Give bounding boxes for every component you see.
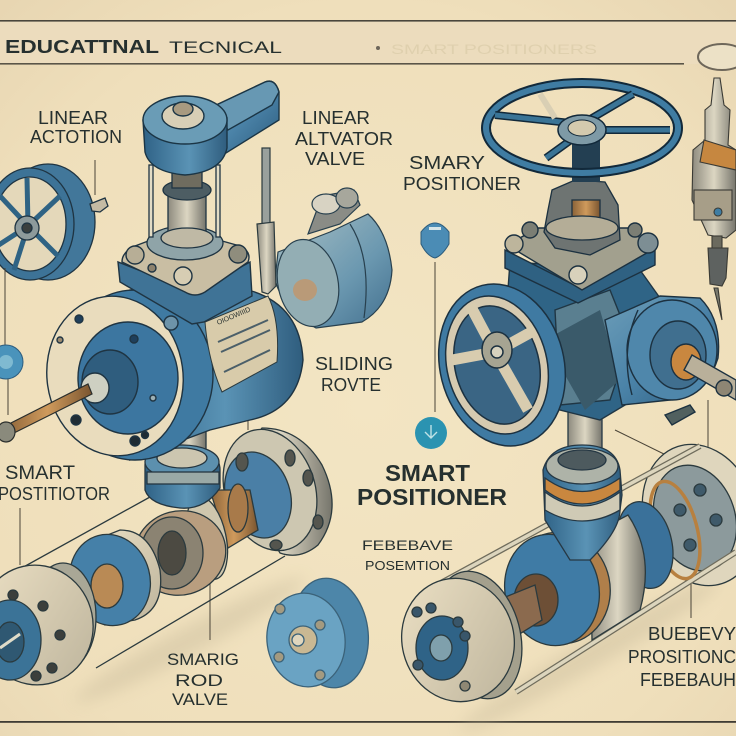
spring shaft	[493, 585, 542, 640]
label: smart postitiotor	[0, 463, 110, 504]
label: smary positioner	[403, 153, 521, 194]
label: smarig rod valve: ROD	[175, 671, 223, 690]
stem and collar right	[543, 395, 622, 560]
actuator cap and arm	[143, 81, 279, 175]
name plate	[205, 296, 278, 392]
lower stem and collar	[145, 425, 220, 508]
label: linear actuator valve: VALVE	[305, 149, 365, 169]
label: linear actotion: ACTOTION	[30, 127, 122, 147]
label: febebave posemtion: POSEMTION	[365, 558, 450, 573]
main drum body	[37, 287, 303, 465]
label: smart positioner main: POSITIONER	[357, 484, 507, 510]
bearing sleeve	[180, 484, 258, 583]
bonnet flange right	[505, 222, 658, 303]
label: linear actuator valve: ALTVATOR	[295, 129, 393, 149]
exploded handwheel left	[0, 164, 108, 280]
title: EDUCATTNAL	[5, 37, 159, 57]
label: linear actotion: LINEAR	[38, 108, 108, 128]
label: smary positioner: SMARY	[409, 153, 485, 173]
label: smarig rod valve: SMARIG	[167, 650, 239, 669]
drum mid	[590, 476, 709, 640]
title: TECNICAL	[169, 38, 282, 57]
faded subtitle	[376, 41, 597, 57]
stem column	[147, 165, 223, 260]
lower cylinder assembly	[0, 417, 332, 696]
blue disc right	[494, 523, 621, 655]
label: smart postitiotor: POSTITIOTOR	[0, 484, 110, 504]
middle blue drum	[59, 525, 161, 635]
rear flange	[208, 417, 332, 563]
rails	[428, 446, 736, 692]
title	[5, 37, 282, 57]
bonnet flange	[118, 231, 252, 324]
leader lines left	[5, 160, 248, 640]
label: smary positioner: POSITIONER	[403, 174, 521, 194]
name plate: OIOOWIIID	[216, 306, 252, 327]
copper disc	[125, 501, 235, 605]
label: smart positioner main: SMART	[385, 460, 470, 486]
label: smarig rod valve	[167, 650, 239, 709]
ground shadows	[69, 567, 727, 736]
bonnet gear	[544, 180, 620, 255]
front flange	[0, 554, 104, 696]
small blue indicator	[421, 223, 449, 258]
right valve assembly	[389, 44, 736, 714]
label: febebave posemtion	[362, 537, 453, 573]
label: linear actotion	[30, 108, 122, 147]
label: smart positioner main	[357, 460, 507, 510]
side rod	[257, 148, 276, 294]
small blue dial	[0, 345, 23, 379]
label: febebave posemtion: FEBEBAVE	[362, 537, 453, 553]
blue puck	[261, 573, 375, 693]
label: linear actuator valve	[295, 108, 393, 169]
label: linear actuator valve: LINEAR	[302, 108, 370, 128]
large wheel right	[422, 270, 582, 460]
label: buebevy prositionc febebauh: FEBEBAUH	[640, 670, 736, 690]
label: buebevy prositionc febebauh: BUEBEVY	[648, 624, 736, 644]
faded subtitle: SMART POSITIONERS	[391, 41, 597, 57]
gearbox body	[505, 262, 665, 420]
motor right	[605, 296, 736, 425]
label: sliding rovte: ROVTE	[321, 375, 381, 395]
teal button	[415, 417, 447, 449]
label: buebevy prositionc febebauh	[628, 624, 736, 690]
handwheel right	[486, 83, 678, 182]
left valve assembly	[0, 81, 392, 696]
actuator motor right	[270, 188, 392, 332]
lower cylinder right	[389, 429, 736, 714]
label: smarig rod valve: VALVE	[172, 690, 228, 709]
shaft	[0, 384, 92, 442]
leader lines right	[435, 262, 708, 618]
label: sliding rovte: SLIDING	[315, 354, 393, 374]
label: sliding rovte	[315, 354, 393, 395]
far right transmitter	[692, 44, 736, 320]
rear flange right	[624, 429, 736, 601]
front flange right	[389, 561, 535, 714]
label: smart postitiotor: SMART	[5, 463, 75, 484]
